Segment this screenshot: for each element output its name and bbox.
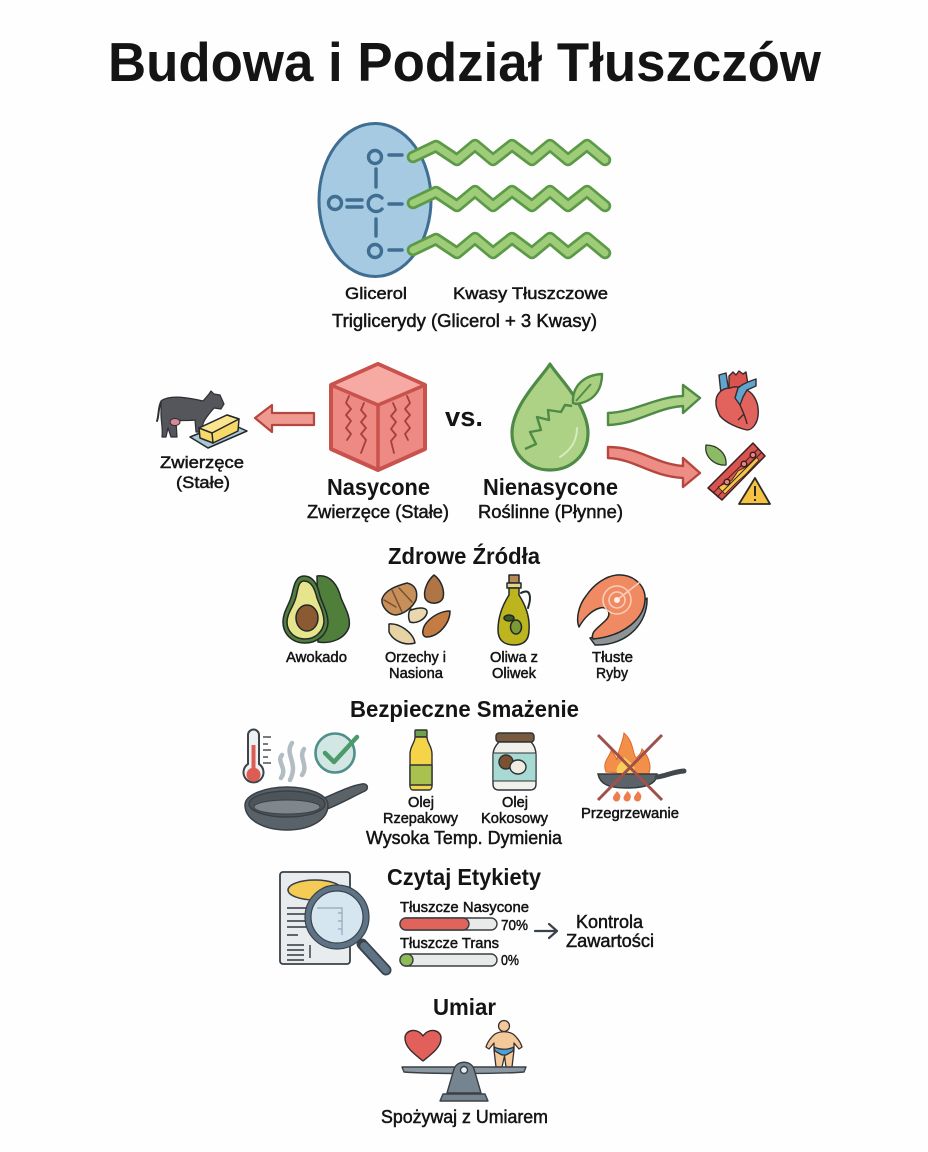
icon: person on scale (486, 1020, 522, 1067)
label: high smoke point: Wysoka Temp. Dymienia (366, 828, 563, 848)
icon: warning triangle (739, 478, 770, 504)
label: olive oil (490, 649, 538, 682)
label: fatty fish: Ryby (596, 665, 628, 682)
label: content control: Kontrola (576, 912, 644, 932)
label: fatty acids: Kwasy Tłuszczowe (453, 284, 608, 303)
icon: olive oil bottle (498, 575, 530, 645)
label: rapeseed oil: Olej (408, 794, 434, 811)
icon: nutrition label document (280, 872, 350, 964)
icon: saturated fat cube (331, 364, 425, 470)
icon: butter on dish (190, 415, 247, 448)
icon: oil drop with leaf (512, 364, 602, 470)
icon: steam (280, 743, 304, 780)
title: Budowa i Podział Tłuszczów (108, 31, 821, 93)
label: content control: Zawartości (566, 931, 654, 951)
progress bar: trans 0% (400, 954, 497, 966)
label: fatty fish (592, 649, 633, 682)
label: avocado: Awokado (286, 649, 347, 666)
icon: magnifying glass (305, 885, 386, 970)
heading: safe frying: Bezpieczne Smażenie (350, 696, 579, 722)
label: nuts and seeds: Orzechy i (385, 649, 446, 666)
icon: nuts and seeds (382, 575, 450, 644)
label: content control (566, 912, 654, 951)
panel: triglyceride structure (319, 124, 608, 331)
heading: healthy sources: Zdrowe Źródła (388, 542, 540, 569)
icon: frying pan (245, 784, 367, 830)
label: consume in moderation: Spożywaj z Umiarem (381, 1107, 548, 1127)
label: saturated description: Zwierzęce (Stałe) (307, 502, 449, 522)
label: coconut oil (481, 794, 548, 827)
icon: salmon steak (578, 575, 647, 645)
label: olive oil: Oliwek (492, 665, 536, 682)
heading: read labels: Czytaj Etykiety (387, 864, 541, 890)
arrow: to clogged artery (608, 447, 700, 487)
icon: leaf near artery (706, 445, 726, 465)
label: unsaturated: Nienasycone (483, 474, 618, 500)
value: 0%: 0% (501, 952, 519, 969)
label: rapeseed oil: Rzepakowy (383, 810, 458, 827)
panel: healthy sources (283, 542, 647, 682)
panel: saturated vs unsaturated (157, 364, 770, 522)
icon: check circle (316, 734, 357, 772)
icon: balance scale (402, 1062, 526, 1101)
label: rapeseed oil (383, 794, 458, 827)
label: animal solid (160, 453, 244, 492)
label: glycerol: Glicerol (345, 284, 407, 303)
label: animal solid: (Stałe) (176, 473, 230, 492)
label: trans fats: Tłuszcze Trans (400, 935, 499, 952)
panel: safe frying (243, 696, 684, 848)
value: 70%: 70% (501, 917, 528, 934)
label: nuts and seeds (385, 649, 446, 682)
label: animal solid: Zwierzęce (160, 453, 244, 472)
fatty acid chains (413, 145, 605, 253)
label: saturated fats: Tłuszcze Nasycone (400, 899, 529, 916)
label: fatty fish: Tłuste (592, 649, 633, 666)
icon: overheating pan with cross (598, 733, 684, 802)
heading: moderation: Umiar (433, 994, 496, 1020)
arrow: to content control (535, 924, 557, 938)
icon: cow (157, 391, 224, 437)
label: unsaturated description: Roślinne (Płynne) (478, 502, 623, 522)
icon: heart (716, 371, 758, 430)
label: vs: vs. (445, 402, 483, 432)
arrow: to heart (608, 385, 700, 425)
icon: heart on scale (405, 1030, 441, 1061)
glycerol ellipse (319, 124, 431, 276)
label: triglycerides: Triglicerydy (Glicerol + 3 Kwasy) (332, 311, 597, 331)
icon: clogged artery (708, 443, 765, 500)
panel: moderation (381, 994, 548, 1127)
panel: read labels (280, 864, 654, 970)
icon: rapeseed oil bottle (410, 730, 432, 790)
label: coconut oil: Kokosowy (481, 810, 548, 827)
icon: thermometer (243, 730, 271, 782)
label: nuts and seeds: Nasiona (389, 665, 444, 682)
icon: avocado (283, 576, 349, 643)
label: overheating: Przegrzewanie (581, 805, 679, 822)
arrow: to animal sources (255, 405, 314, 432)
label: olive oil: Oliwa z (490, 649, 538, 666)
progress bar: saturated 70% (400, 918, 497, 930)
label: coconut oil: Olej (502, 794, 528, 811)
label: saturated: Nasycone (327, 474, 430, 500)
icon: coconut oil jar (493, 733, 536, 790)
